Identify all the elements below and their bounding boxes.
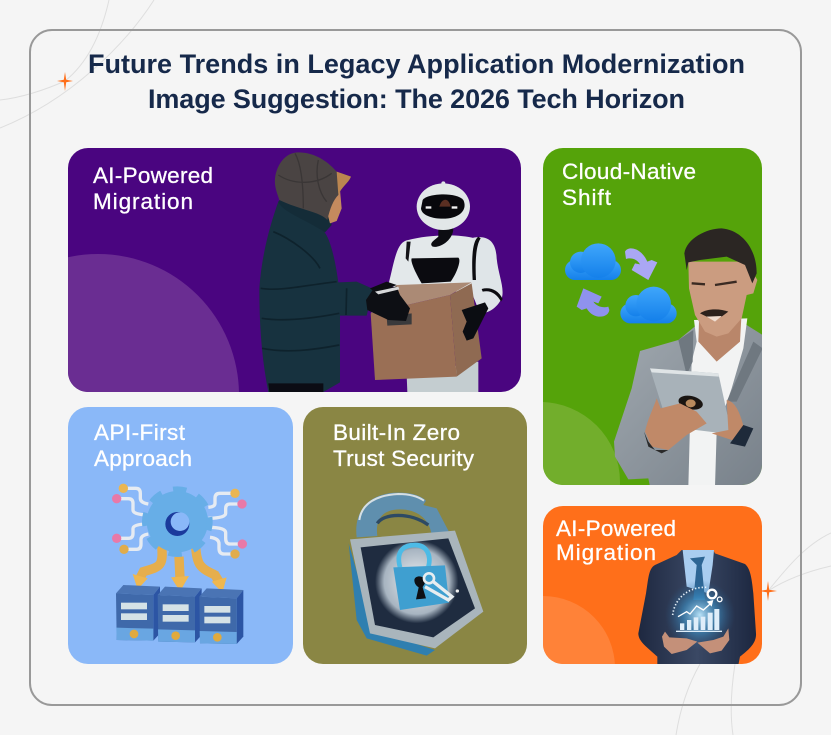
panel: AI-Powered Migration orange [543, 506, 762, 664]
panel: Cloud-Native Shift green [543, 148, 762, 485]
heading: API-First Approach: Approach [94, 446, 192, 471]
heading: Cloud-Native Shift: Shift [562, 185, 612, 210]
title: Future Trends in Legacy Application Modernization [88, 49, 745, 79]
heading: Built-In Zero Trust Security: Trust Security [333, 446, 475, 471]
illustration: businessman holding chart [638, 550, 756, 665]
icon: orange sparkle left [57, 72, 73, 91]
heading: AI-Powered Migration: Migration [93, 189, 193, 214]
icon: orange sparkle right [759, 581, 777, 601]
panel: AI-Powered Migration purple [68, 148, 521, 392]
heading: API-First Approach: API-First [94, 420, 186, 445]
title [88, 49, 745, 114]
title: Image Suggestion: The 2026 Tech Horizon [148, 84, 685, 114]
panel: API-First Approach blue [68, 407, 293, 664]
heading: Built-In Zero Trust Security: Built-In Zero [333, 420, 460, 445]
heading: AI-Powered Migration: Migration [556, 540, 656, 565]
illustration: clouds and arrows [565, 243, 677, 323]
heading: AI-Powered Migration: AI-Powered [93, 163, 213, 188]
illustration: man with tablet [614, 228, 763, 487]
illustration: person and robot with box [259, 152, 503, 392]
heading: Cloud-Native Shift: Cloud-Native [562, 159, 696, 184]
illustration: gear with wires and servers [112, 484, 247, 644]
illustration: padlock [349, 493, 483, 656]
panel: Built-In Zero Trust Security olive [303, 407, 527, 664]
heading: AI-Powered Migration: AI-Powered [556, 516, 676, 541]
